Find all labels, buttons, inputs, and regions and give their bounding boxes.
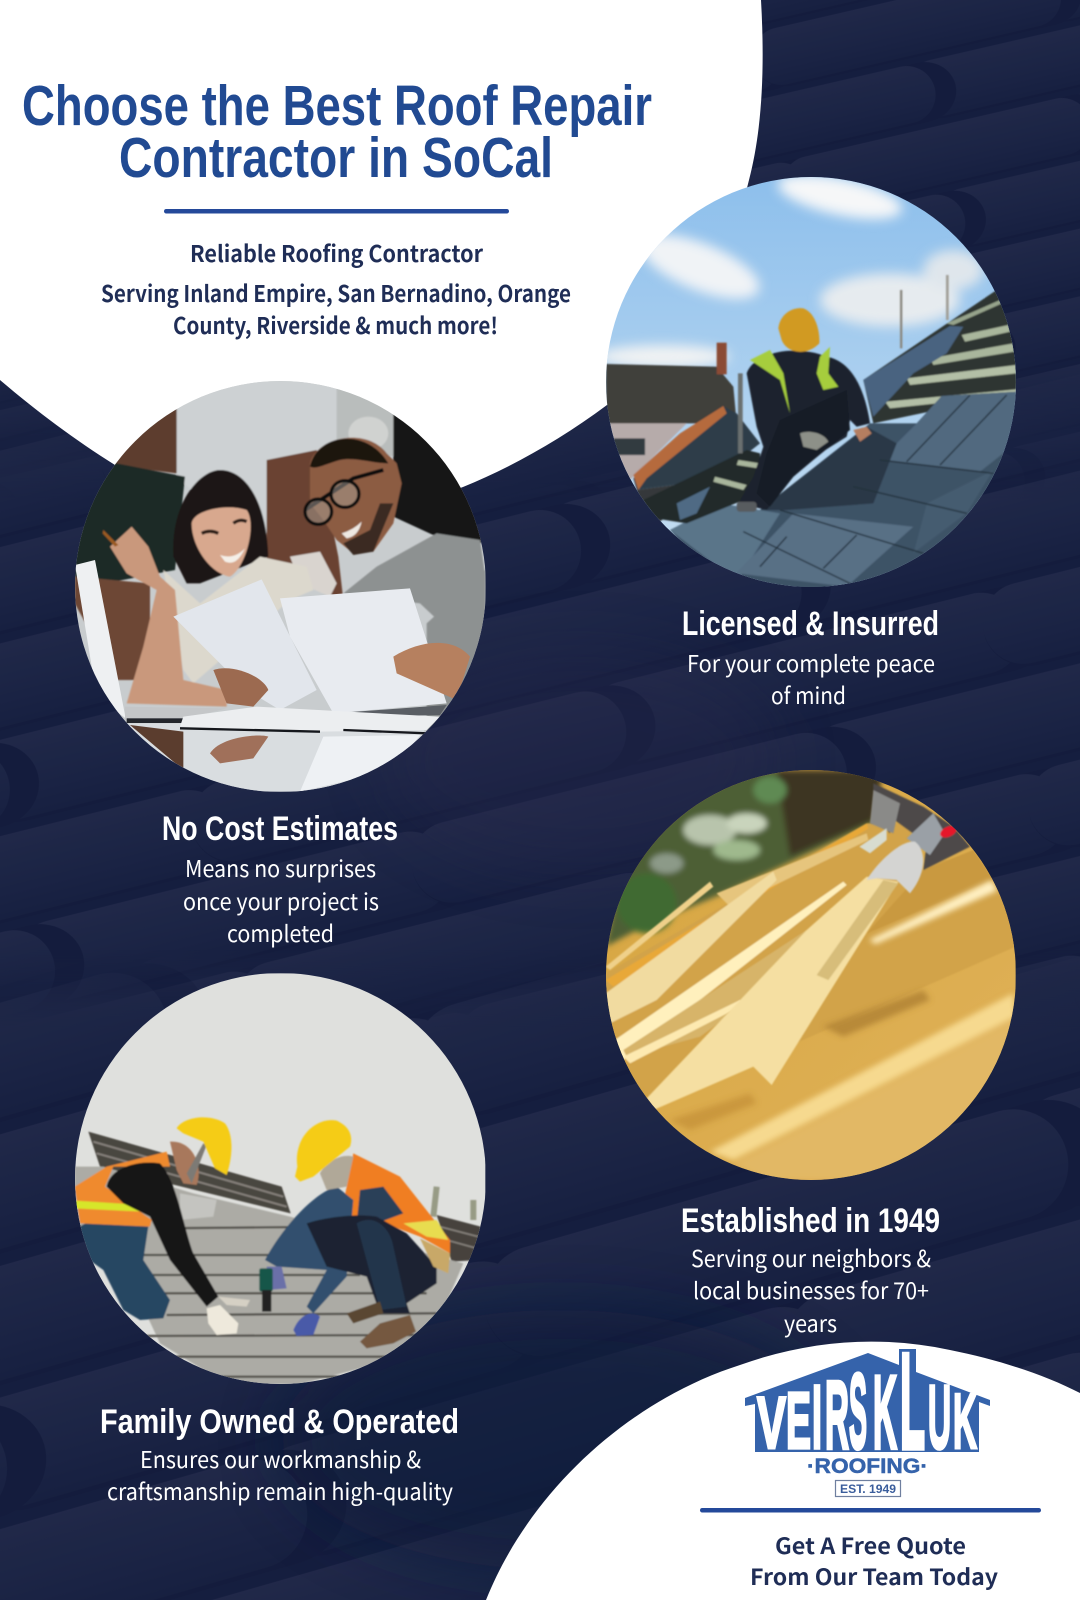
roofer (738, 351, 870, 510)
feature text: Established in 1949: local businesses for 70+ (693, 1272, 929, 1306)
woman (173, 470, 268, 583)
footer rule (700, 1508, 1041, 1512)
subtitle text: Reliable Roofing Contractor (190, 235, 484, 269)
feature text: Licensed & Insurred: Licensed & Insurred (682, 605, 939, 643)
feature text: No Cost Estimates: No Cost Estimates (162, 810, 398, 848)
papers (173, 579, 317, 710)
title: Contractor in SoCal (119, 126, 553, 190)
logo: Veirs Kluk Roofing: V (757, 1382, 786, 1464)
lower battens (643, 450, 760, 523)
left worker (80, 1217, 170, 1320)
logo: Veirs Kluk Roofing: S (849, 1351, 867, 1471)
subtitle text: County, Riverside & much more! (173, 307, 498, 341)
photo: couple reviewing estimate papers (75, 381, 485, 792)
logo est badge: EST. 1949 (840, 1482, 896, 1496)
call to action: From Our Team Today (750, 1560, 998, 1592)
call to action (750, 1529, 998, 1592)
photo: two workers on tile roof (75, 973, 485, 1384)
feature text: Established in 1949: years (784, 1305, 837, 1339)
logo: Veirs Kluk Roofing: K (953, 1378, 977, 1465)
title (22, 74, 652, 190)
man (344, 532, 485, 617)
battens (863, 290, 1017, 423)
feature text: Family Owned & Operated: Family Owned & Operated (100, 1403, 459, 1441)
logo: Veirs Kluk Roofing: E (786, 1376, 811, 1466)
logo: Veirs Kluk Roofing: L (900, 1326, 925, 1478)
feature text: Licensed & Insurred: of mind (771, 677, 846, 711)
feature text: Established in 1949: Established in 1949 (681, 1202, 940, 1240)
call to action: Get A Free Quote (775, 1529, 966, 1561)
feature text: Licensed & Insurred (682, 605, 939, 711)
subtitle text (101, 235, 571, 341)
panel: bottom white blob (486, 1342, 1080, 1600)
slate main (670, 392, 1017, 590)
photo: roofer on slate roof (597, 166, 1017, 590)
logo: Veirs Kluk Roofing: I (812, 1367, 822, 1468)
logo: Veirs Kluk Roofing (745, 1326, 990, 1496)
logo: Veirs Kluk Roofing: U (928, 1368, 951, 1468)
subtitle text: Serving Inland Empire, San Bernadino, Orange (101, 275, 571, 309)
feature text: Family Owned & Operated: Ensures our workmanship & (140, 1441, 421, 1475)
feature text: Established in 1949 (681, 1202, 940, 1339)
logo: Veirs Kluk Roofing: R (825, 1361, 849, 1469)
feature text: No Cost Estimates: Means no surprises (185, 850, 376, 884)
right worker (340, 1153, 450, 1253)
feature text: Licensed & Insurred: For your complete peace (687, 645, 935, 679)
laptop (75, 560, 126, 718)
gloves and sleeves (873, 783, 970, 870)
feature text: Family Owned & Operated (100, 1403, 459, 1507)
feature text: No Cost Estimates (162, 810, 398, 949)
title: Choose the Best Roof Repair (22, 74, 652, 138)
feature text: No Cost Estimates: once your project is (183, 883, 379, 917)
photo: lumber roof framing (606, 770, 1016, 1180)
feature text: Established in 1949: Serving our neighbors & (691, 1240, 931, 1274)
title rule (164, 209, 509, 214)
feature text: Family Owned & Operated: craftsmanship remain high-quality (107, 1473, 453, 1507)
panel: top white blob (0, 0, 763, 514)
logo: Veirs Kluk Roofing: K (873, 1355, 897, 1471)
logo wordmark: ·ROOFING· (807, 1454, 928, 1478)
feature text: No Cost Estimates: completed (227, 915, 334, 949)
